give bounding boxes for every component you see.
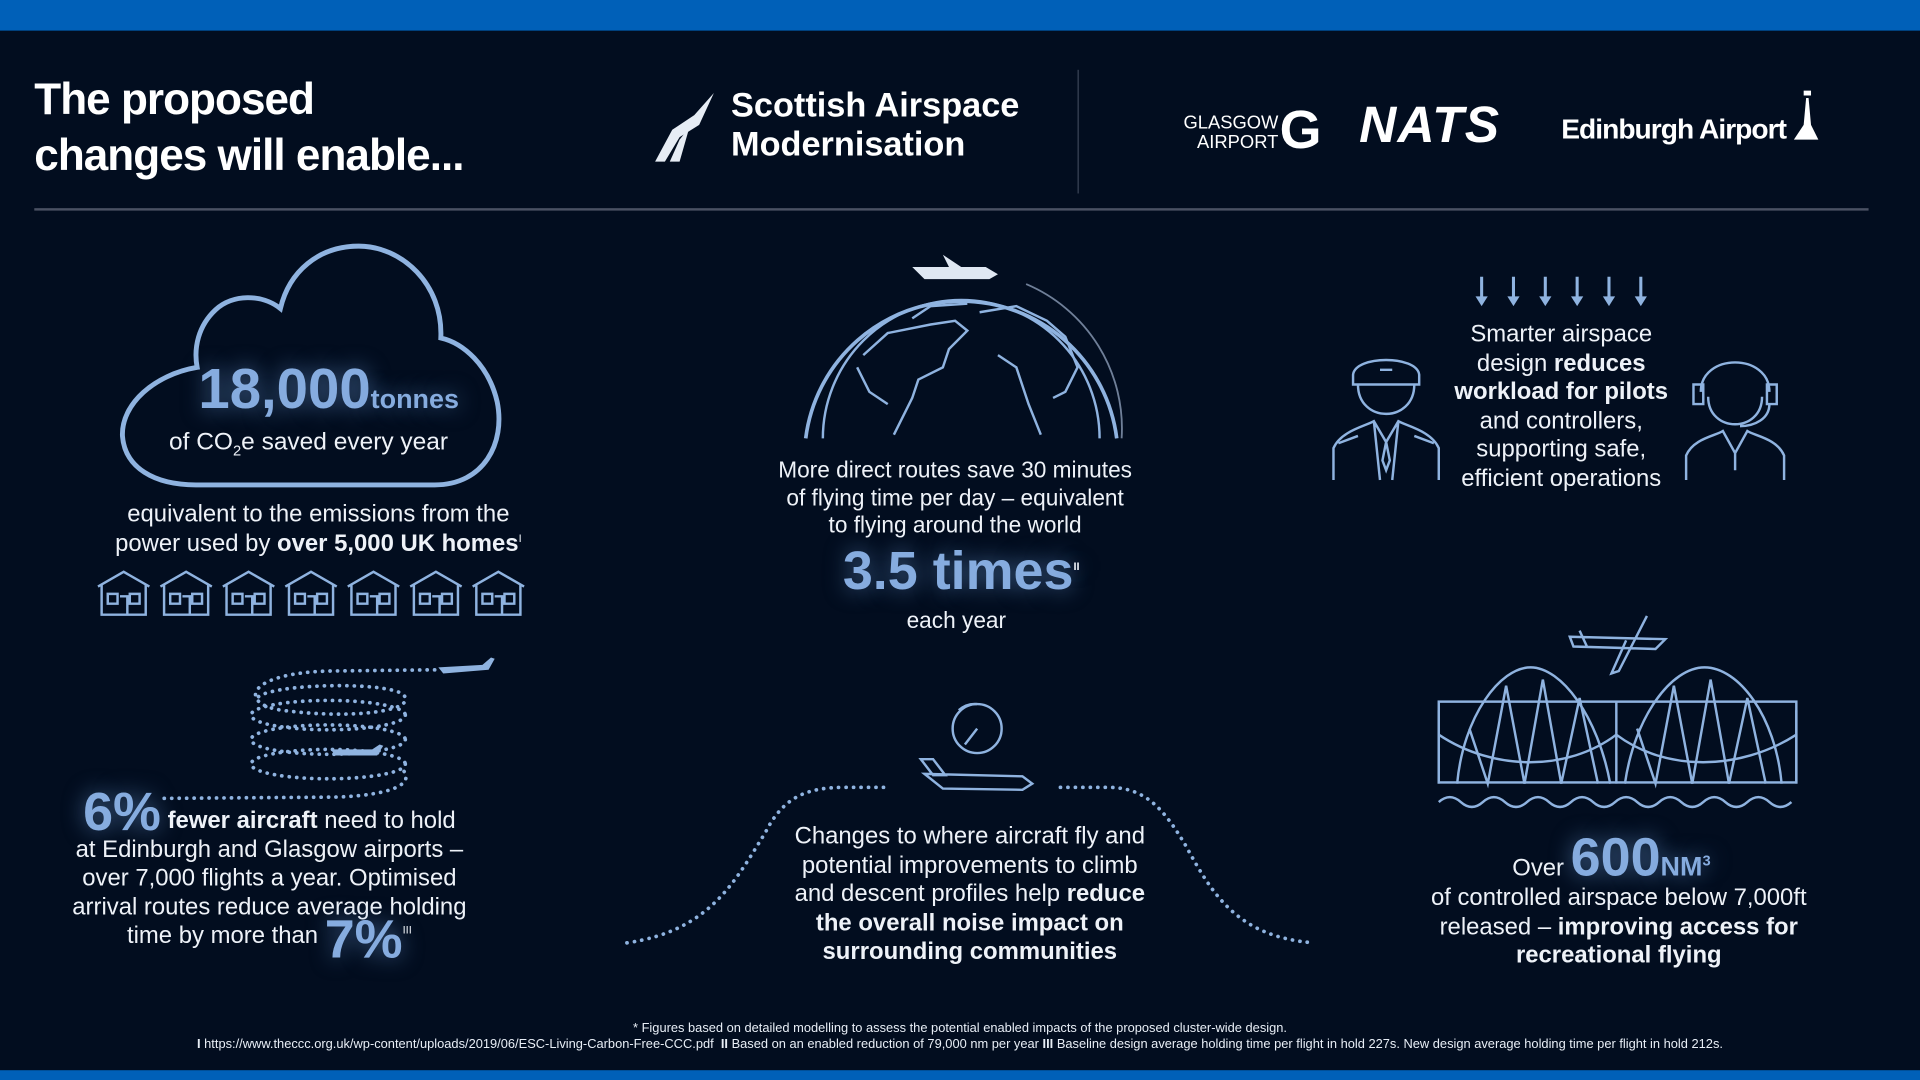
top bar	[0, 0, 1920, 31]
text: noise	[795, 823, 1145, 965]
logo: Glasgow Airport: G	[1280, 100, 1322, 160]
title	[34, 73, 464, 180]
text: noise: the overall noise impact on	[816, 909, 1124, 936]
icon: noise profile	[625, 702, 1310, 945]
text: 6% fewer aircraft	[72, 782, 466, 970]
panel: holding	[72, 658, 495, 970]
bottom bar	[0, 1070, 1920, 1080]
title: The proposed	[34, 73, 314, 124]
logo: Edinburgh Airport	[1561, 90, 1818, 144]
text: 6% fewer aircraft: over 7,000 flights a year. Optimised	[82, 864, 457, 891]
title: changes will enable...	[34, 130, 464, 180]
text: CO2 saved: of CO2e saved every year	[169, 429, 448, 459]
text: airspace	[1431, 884, 1807, 969]
logo: Scottish Airspace Modernisation: Scottish Airspace	[731, 86, 1019, 124]
logo: Edinburgh Airport: Edinburgh Airport	[1561, 113, 1786, 144]
text: 6% fewer aircraft: 6% fewer aircraft need to hold	[83, 782, 456, 842]
logo: Scottish Airspace Modernisation	[655, 86, 1019, 163]
text: airspace: recreational flying	[1516, 942, 1722, 969]
text: noise: surrounding communities	[823, 938, 1117, 965]
panel: direct routes	[778, 254, 1132, 633]
stat: over 600 NM3: Over 600NM3	[1512, 828, 1711, 888]
icon: globe with plane	[804, 254, 1123, 439]
text: noise: and descent profiles help reduce	[795, 880, 1145, 907]
text: direct routes: More direct routes save 30 minutes	[778, 457, 1132, 482]
footnotes: I https://www.theccc.org.uk/wp-content/uploads/2019/06/ESC-Living-Carbon-Free-CCC.pdf II Based on an enabled reduction of 79,000 nm per year III Baseline design average holding time per flight in hold 227s. New design average holding time per flight in hold 212s.	[197, 1037, 1723, 1052]
icon: arrows	[1476, 276, 1647, 306]
text: workload: and controllers,	[1480, 407, 1643, 434]
text: workload	[1454, 321, 1668, 492]
text: workload: efficient operations	[1461, 465, 1661, 492]
text: equivalent homes: power used by over 5,000 UK homesI	[115, 530, 522, 557]
icon: cloud	[120, 244, 502, 488]
text: noise: Changes to where aircraft fly and	[795, 823, 1145, 850]
footnotes: * Figures based on detailed modelling to assess the potential enabled impacts of the proposed cluster-wide design.	[633, 1021, 1287, 1036]
logo: Glasgow Airport	[1183, 100, 1322, 160]
text: 6% fewer aircraft: at Edinburgh and Glasgow airports –	[76, 836, 463, 863]
text: each year: each year	[907, 607, 1006, 633]
logo: Glasgow Airport: AIRPORT	[1197, 132, 1278, 153]
text: airspace: of controlled airspace below 7,000ft	[1431, 884, 1807, 911]
text: 6% fewer aircraft: arrival routes reduce average holding	[72, 893, 466, 920]
logo: NATS: NATS	[1359, 96, 1500, 153]
icon: plane and bridge	[1438, 615, 1798, 808]
text: workload: design reduces	[1477, 350, 1646, 377]
panel: workload	[1332, 276, 1786, 492]
icon: houses	[97, 570, 525, 616]
footnotes	[197, 1021, 1723, 1052]
text: workload: supporting safe,	[1476, 436, 1646, 463]
text: workload: workload for pilots	[1454, 378, 1668, 405]
icon: controller	[1684, 361, 1786, 480]
text: direct routes: of flying time per day – equivalent	[786, 484, 1124, 510]
header rule	[34, 208, 1869, 211]
text: direct routes	[778, 457, 1132, 538]
text: workload: Smarter airspace	[1470, 321, 1652, 348]
text: equivalent homes: equivalent to the emissions from the	[127, 501, 509, 528]
logo: Glasgow Airport: GLASGOW	[1183, 113, 1278, 133]
text: noise: potential improvements to climb	[802, 852, 1138, 879]
text: airspace: released – improving access for	[1440, 913, 1798, 940]
icon: holding stack	[162, 658, 495, 800]
text: equivalent homes	[115, 501, 522, 557]
text: 6% fewer aircraft: time by more than 7%III	[127, 910, 412, 970]
stat: 3.5 times: 3.5 timesII	[843, 541, 1080, 601]
logo: Scottish Airspace Modernisation: Modernisation	[731, 125, 965, 163]
panel: noise	[625, 702, 1310, 965]
panel: CO2 saving	[97, 244, 525, 616]
panel: airspace released	[1431, 615, 1807, 969]
icon: pilot	[1332, 358, 1440, 480]
stat: 18,000 tonnes: 18,000tonnes	[198, 356, 459, 420]
divider	[1078, 70, 1079, 193]
text: direct routes: to flying around the world	[829, 512, 1082, 538]
